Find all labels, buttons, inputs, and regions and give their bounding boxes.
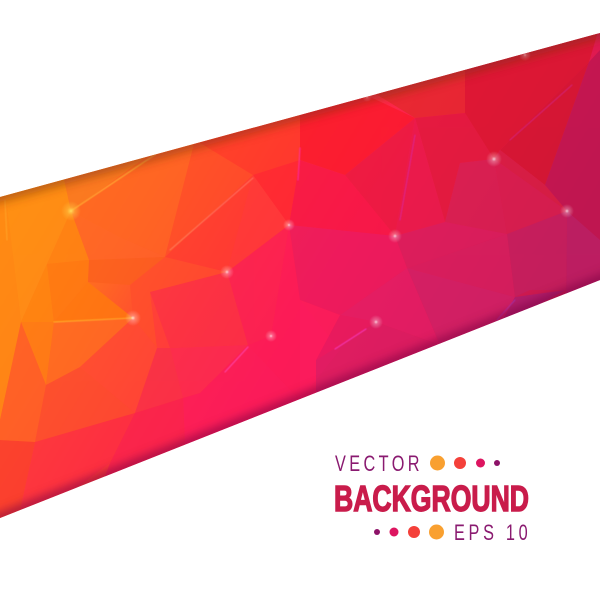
- light streaks: [5, 85, 572, 372]
- central orange-red facets: [20, 115, 301, 510]
- left orange facets: [0, 150, 156, 525]
- text: EPS 10: EPS 10: [454, 521, 531, 546]
- title block: [334, 452, 531, 546]
- sparkles: [61, 49, 574, 342]
- crimson upper facets: [289, 25, 600, 345]
- magenta lower facets: [289, 225, 440, 410]
- text: BACKGROUND: BACKGROUND: [334, 478, 529, 519]
- dots: top row: [430, 456, 500, 470]
- text: VECTOR: VECTOR: [335, 452, 423, 477]
- dots: bottom row: [374, 524, 444, 540]
